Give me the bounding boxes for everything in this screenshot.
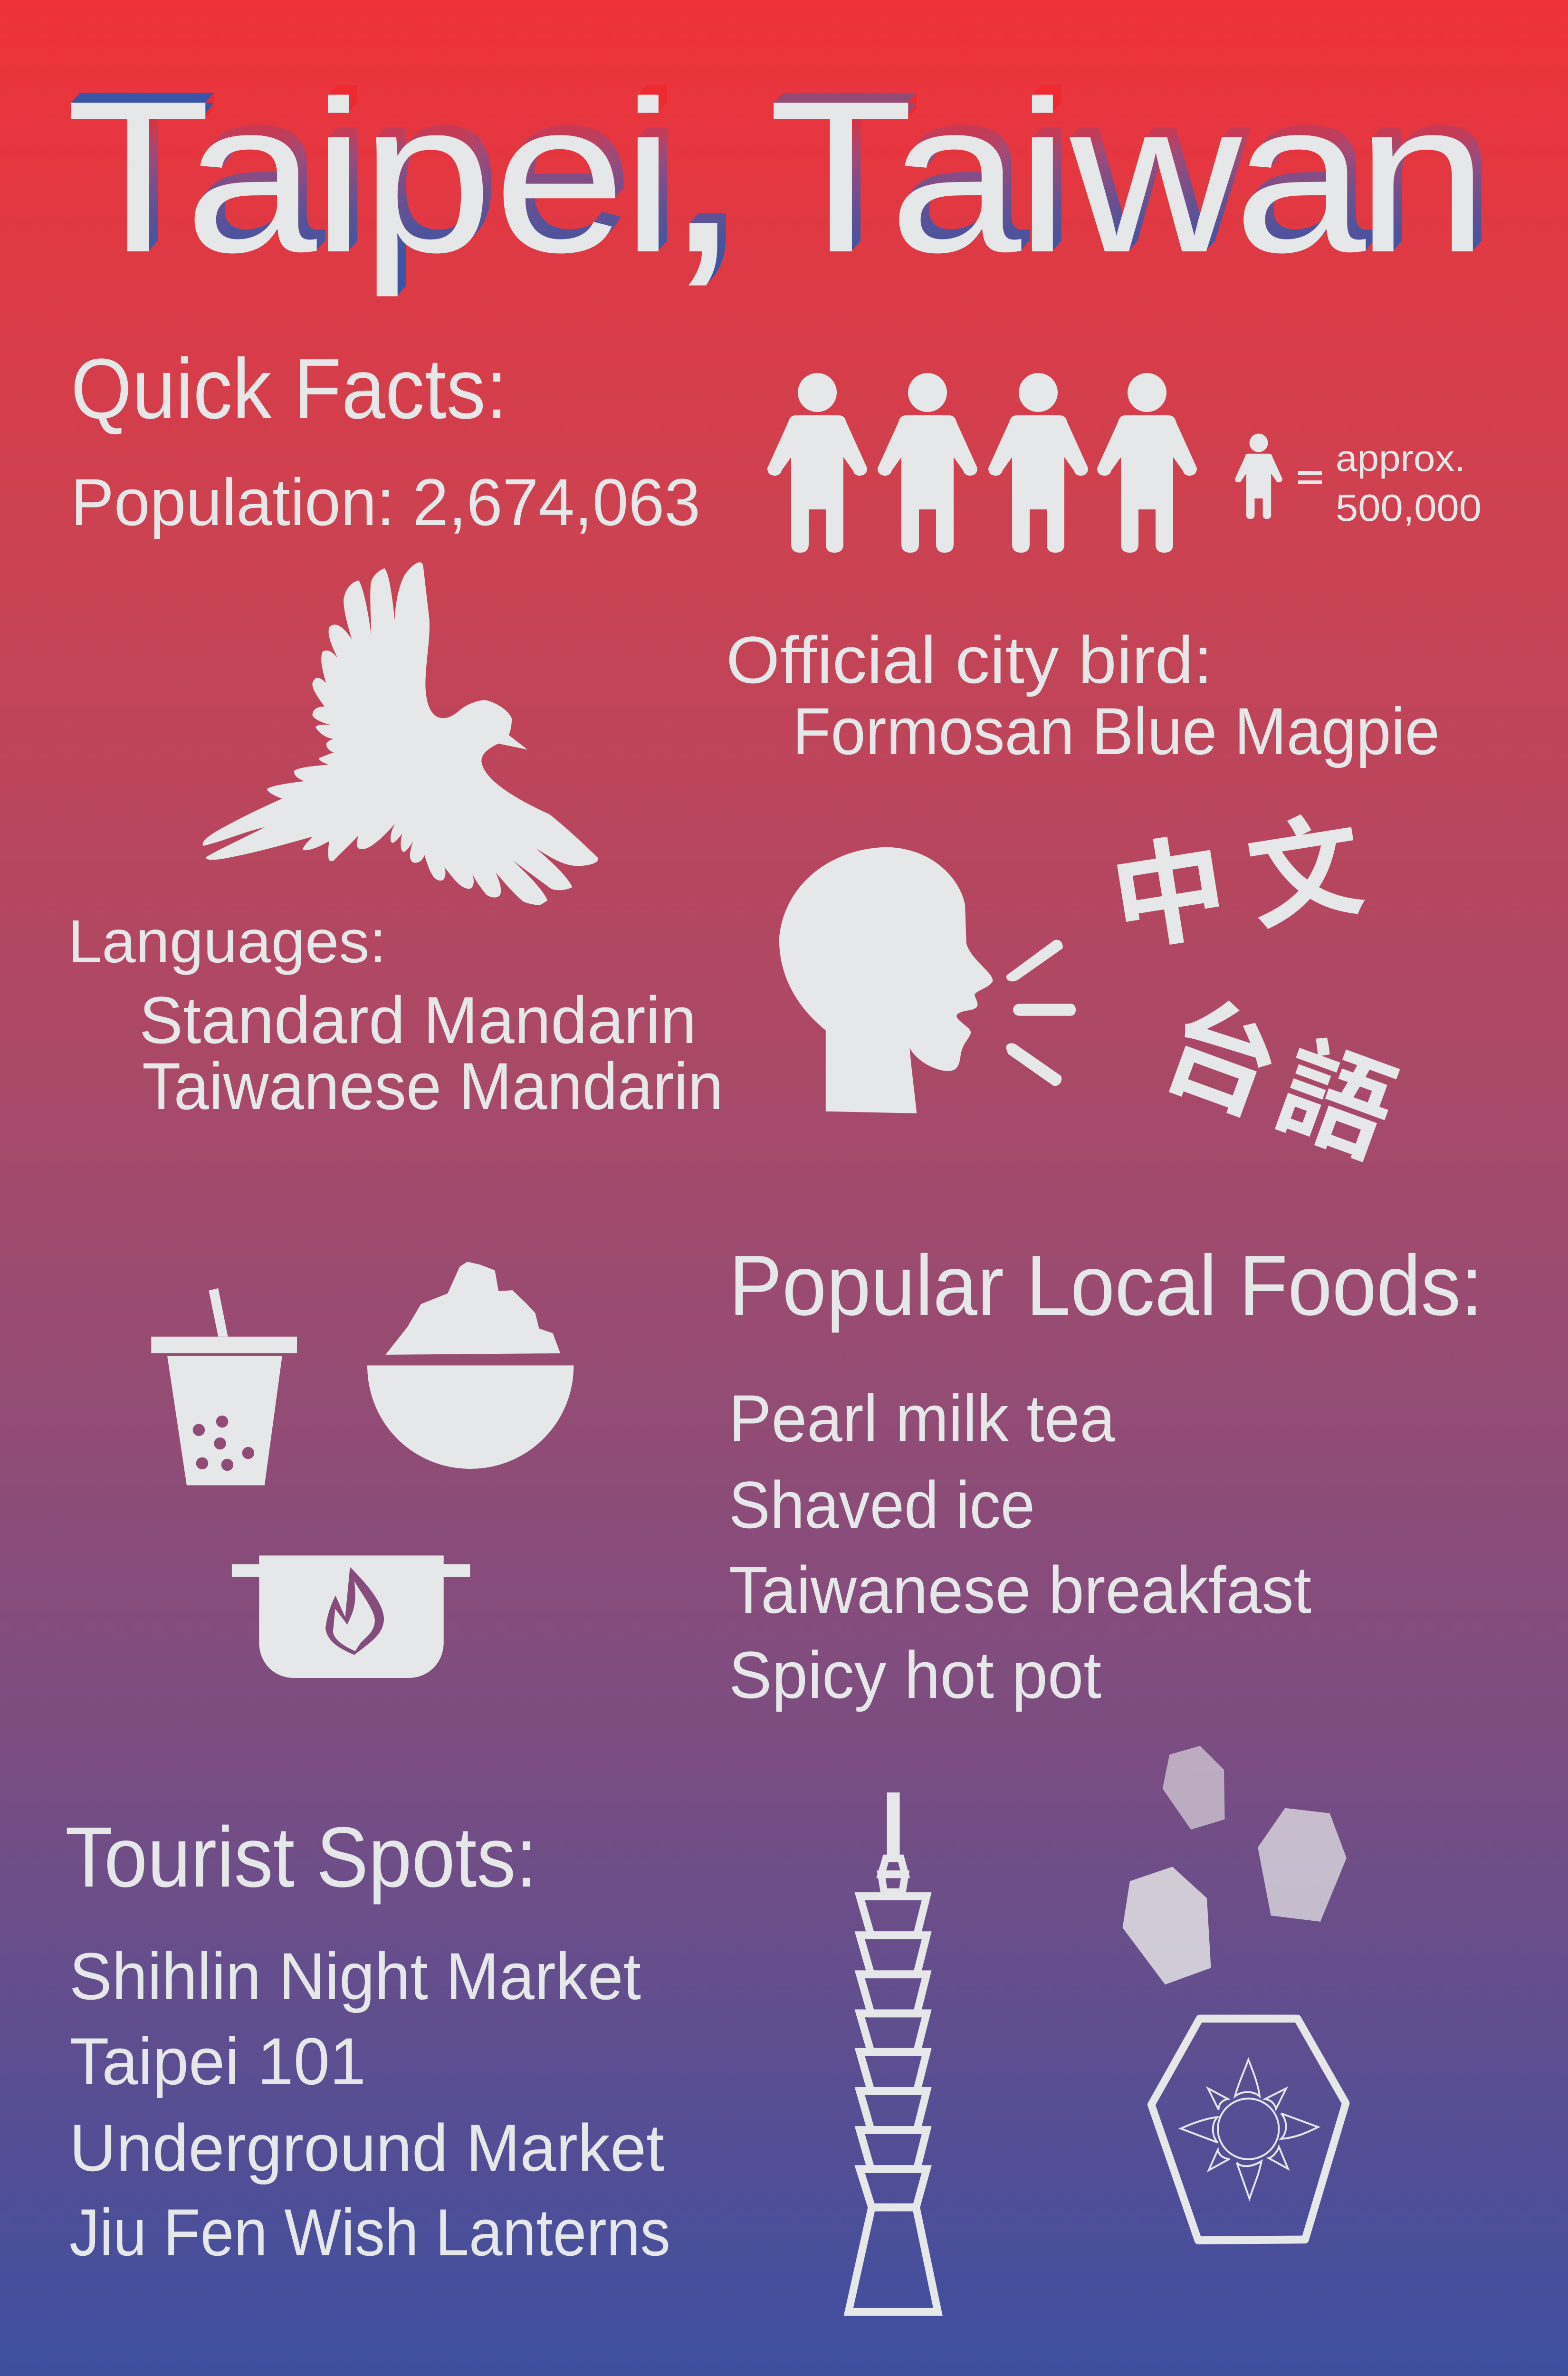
heading: popular local foods: Popular Local Foods: bbox=[729, 1238, 1483, 1333]
title bbox=[66, 0, 1497, 308]
icon: person 2 bbox=[878, 373, 977, 553]
title: Taiwan bbox=[736, 51, 1492, 293]
title: Taipei bbox=[74, 46, 683, 289]
list item: shihlin night market: Shihlin Night Market bbox=[69, 1939, 641, 2013]
legend: one person equals approx. 500,000 bbox=[1235, 434, 1482, 529]
icon: lantern with sun emblem bbox=[1151, 2019, 1346, 2241]
title: , bbox=[662, 10, 744, 308]
panel: tourist spots bbox=[65, 1810, 670, 2270]
value: Taiwanese Mandarin: Taiwanese Mandarin bbox=[142, 1049, 723, 1123]
lantern outline bbox=[1151, 2019, 1346, 2241]
text: official city bird bbox=[726, 623, 1440, 768]
icon: speaking head bbox=[779, 847, 1076, 1113]
text: approx.: approx. bbox=[1336, 437, 1465, 479]
title: Taipei bbox=[66, 56, 675, 299]
pictogram: four people bbox=[767, 373, 1197, 553]
label: official city bird: Official city bird: bbox=[726, 623, 1213, 697]
title: Taipei bbox=[70, 51, 679, 294]
title: , bbox=[667, 5, 748, 303]
panel: quick facts bbox=[71, 341, 700, 539]
text: Chinese characters for Taiwanese: 台語 bbox=[1147, 981, 1419, 1182]
title: , bbox=[665, 7, 746, 305]
text: population: Population: 2,674,063 bbox=[71, 465, 700, 539]
head silhouette bbox=[779, 847, 993, 1113]
list item: taiwanese breakfast: Taiwanese breakfast bbox=[729, 1552, 1311, 1627]
list item: jiu fen wish lanterns: Jiu Fen Wish Lanterns bbox=[69, 2195, 670, 2270]
title: Taiwan bbox=[740, 46, 1497, 287]
label: languages: Languages: bbox=[68, 908, 386, 976]
list item: spicy hot pot: Spicy hot pot bbox=[729, 1638, 1101, 1712]
icon: pearl milk tea bbox=[151, 1288, 297, 1485]
title: , bbox=[664, 9, 745, 306]
icon: person 3 bbox=[988, 373, 1088, 553]
list item: taipei 101: Taipei 101 bbox=[69, 2024, 366, 2098]
heading: tourist spots: Tourist Spots: bbox=[65, 1810, 537, 1905]
panel: popular local foods bbox=[729, 1238, 1483, 1712]
title: Taipei bbox=[71, 49, 680, 292]
icon: hot pot bbox=[232, 1555, 470, 1678]
value: Formosan Blue Magpie: Formosan Blue Magpie bbox=[793, 694, 1440, 768]
text: 500,000: 500,000 bbox=[1336, 487, 1482, 529]
title: , bbox=[668, 4, 749, 301]
icon: shaved ice bbox=[367, 1262, 574, 1469]
icon: small person bbox=[1235, 434, 1282, 519]
title: Taiwan bbox=[737, 49, 1494, 291]
title: Taipei bbox=[67, 55, 676, 297]
icon: person 4 bbox=[1097, 373, 1197, 553]
title: Taiwan bbox=[732, 56, 1488, 297]
title: , bbox=[669, 2, 751, 299]
title: Taiwan bbox=[739, 48, 1495, 289]
list item: shaved ice: Shaved ice bbox=[729, 1467, 1035, 1542]
icons: local foods bbox=[151, 1262, 574, 1678]
title: Taiwan bbox=[735, 53, 1491, 294]
list item: pearl milk tea: Pearl milk tea bbox=[729, 1381, 1115, 1456]
icon: bird silhouette bbox=[202, 562, 598, 905]
icon: sky lanterns bbox=[1123, 1746, 1347, 1984]
icon: Taipei 101 tower bbox=[849, 1792, 938, 2312]
value: Standard Mandarin: Standard Mandarin bbox=[139, 983, 697, 1057]
sun emblem bbox=[1181, 2060, 1318, 2199]
heading: quick facts: Quick Facts: bbox=[71, 341, 507, 437]
speech marks bbox=[1006, 940, 1076, 1086]
title: Taiwan bbox=[733, 55, 1490, 296]
equals sign bbox=[1298, 471, 1322, 484]
lantern: right bbox=[1258, 1808, 1347, 1922]
text: languages bbox=[68, 908, 723, 1123]
list item: underground market: Underground Market bbox=[69, 2110, 664, 2185]
text: Chinese characters for Chinese: 中文 bbox=[1103, 797, 1395, 967]
lantern: left bbox=[1123, 1867, 1211, 1984]
lantern: top bbox=[1163, 1746, 1225, 1830]
title: Taipei bbox=[73, 48, 682, 290]
title: Taipei bbox=[68, 53, 678, 296]
title: , bbox=[671, 0, 752, 298]
icon: person 1 bbox=[767, 373, 867, 553]
